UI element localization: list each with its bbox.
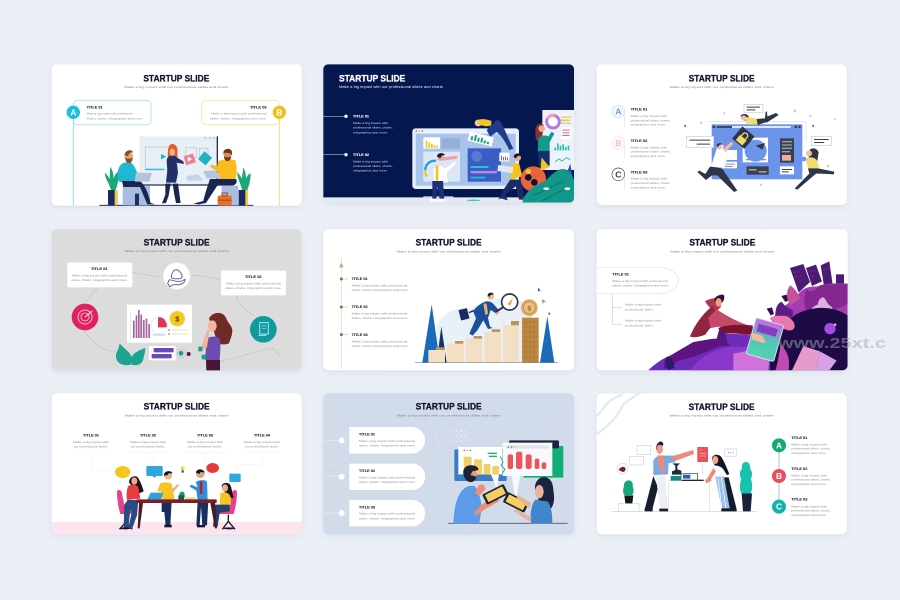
icon: document	[250, 316, 277, 343]
item A: TITLE 01	[631, 108, 648, 112]
step 1: Make a big impact with professional	[352, 283, 408, 287]
item C: professional slides, charts,	[631, 181, 671, 185]
chart board	[127, 305, 192, 343]
pill 3: TITLE 03	[359, 505, 375, 509]
panel: slide 9 desk discussion with circles	[597, 393, 847, 534]
item B: infographics and more.	[791, 482, 827, 486]
pill 3	[323, 500, 425, 526]
item 2: Make a big impact with	[353, 159, 389, 163]
note 1	[67, 263, 132, 287]
column 3: TITLE 03	[197, 433, 213, 437]
step 3: Make a big impact with professional	[352, 339, 408, 343]
item C: C	[776, 502, 782, 512]
sub-items: professional slides.	[625, 323, 654, 327]
item 2: professional slides, charts,	[353, 164, 393, 168]
note 2	[221, 271, 286, 295]
column 4	[237, 433, 281, 473]
dashed connectors	[85, 272, 279, 361]
heading	[670, 402, 774, 418]
heading: Make a big impact with our professional slides and charts	[397, 249, 501, 253]
callout B: TITLE 02	[250, 106, 267, 110]
heading	[339, 74, 443, 89]
illustration: meeting table	[117, 469, 237, 529]
item A: TITLE 01	[791, 436, 808, 440]
step 1	[340, 277, 409, 292]
chart board: $	[175, 314, 179, 323]
item C: Make a big impact with	[791, 504, 827, 508]
woman thinking	[198, 313, 232, 370]
watermark: www.25xt.c	[777, 336, 886, 352]
heading: STARTUP SLIDE	[689, 238, 755, 248]
illustration: two colleagues at desk	[612, 441, 757, 511]
panel: slide 1 two titles with team at screen	[52, 64, 302, 206]
pill 3: slides, charts, infographics and more.	[359, 516, 416, 520]
heading	[125, 402, 229, 418]
pill 2: Make a big impact with professional	[359, 475, 415, 479]
item A: infographics and more.	[791, 451, 827, 455]
column 2: our professional slides.	[131, 445, 166, 449]
icon: hand holding money bag	[163, 263, 190, 289]
timeline	[339, 257, 344, 369]
pill 3: Make a big impact with professional	[359, 512, 415, 516]
pill 2	[323, 464, 425, 490]
column 2: Make a big impact with	[130, 440, 167, 444]
callout B: B	[276, 107, 282, 117]
heading: STARTUP SLIDE	[144, 237, 210, 247]
item A	[772, 436, 831, 455]
step 2	[340, 305, 409, 320]
sub-items: Make a big impact with	[625, 302, 662, 306]
item C: professional slides, charts,	[791, 509, 831, 513]
illustration: businessman climbing steps: $	[527, 305, 531, 312]
panel: slide 5 timeline with stair climbing	[323, 229, 574, 370]
pill 1: TITLE 01	[359, 433, 375, 437]
heading: Make a big impact with our professional slides and charts	[339, 85, 443, 89]
step 3: TITLE 03	[352, 333, 368, 337]
callout A	[67, 100, 151, 206]
callout B	[202, 100, 286, 206]
pill 1: slides, charts, infographics and more.	[359, 444, 416, 448]
sub-items: professional slides.	[625, 307, 654, 311]
sub-items: Make a big impact with	[625, 318, 662, 322]
connector	[777, 445, 781, 507]
column 3: our professional slides.	[188, 445, 223, 449]
column 1: Make a big impact with	[73, 440, 110, 444]
callout A: A	[70, 107, 76, 117]
illustration: businessman climbing steps	[415, 287, 558, 363]
title pill: Make a big impact with professional	[612, 279, 668, 283]
heading: Make a big impact with our professional slides and charts	[397, 414, 501, 418]
item A: A	[776, 440, 782, 450]
item 1: infographics and more.	[353, 130, 388, 134]
leaves	[116, 343, 145, 365]
note 1: Make a big impact with professional	[72, 273, 127, 277]
pill 1: Make a big impact with professional	[359, 439, 415, 443]
heading	[124, 74, 229, 89]
item B: TITLE 02	[631, 139, 648, 143]
title pill: slides, charts, infographics and more.	[612, 283, 669, 287]
item 2: infographics and more.	[353, 169, 388, 173]
heading	[670, 74, 774, 89]
heading: STARTUP SLIDE	[339, 74, 405, 84]
step 2: TITLE 02	[352, 305, 368, 309]
heading: Make a big impact with our professional slides and charts	[125, 249, 229, 253]
callout A: Make a big impact with professional	[87, 112, 133, 116]
heading: STARTUP SLIDE	[143, 74, 209, 84]
illustration: two people with tablets and charts	[448, 430, 568, 523]
step 2: Make a big impact with professional	[352, 311, 408, 315]
item A: Make a big impact with	[631, 114, 667, 118]
item B: professional slides, charts,	[631, 150, 671, 154]
heading: Make a big impact with our professional slides and charts	[670, 414, 774, 418]
illustration: dashboard and people	[412, 110, 574, 203]
heading	[670, 238, 775, 253]
step 1: slides, charts, infographics and more.	[352, 288, 409, 292]
pill 1	[323, 427, 425, 454]
column 1	[72, 433, 115, 471]
heading: Make a big impact with our professional slides and charts	[670, 85, 774, 89]
chat card	[149, 346, 191, 360]
heading: STARTUP SLIDE	[144, 402, 210, 412]
heading: STARTUP SLIDE	[416, 238, 482, 248]
icon: target	[72, 304, 98, 330]
panel: slide 4 grey with icons	[52, 229, 302, 370]
item A: professional slides, charts,	[631, 118, 671, 122]
heading	[397, 402, 501, 418]
callout B: Make a big impact with professional	[211, 112, 267, 116]
illustration: team at screen	[99, 136, 253, 205]
speech bubbles	[115, 463, 241, 482]
column 4: our professional slides.	[245, 445, 280, 449]
item C: TITLE 03	[631, 170, 648, 174]
heading	[125, 237, 229, 253]
sub-items	[613, 293, 662, 327]
heading: Make a big impact with our professional slides and charts	[125, 414, 229, 418]
heading: Make a big impact with our professional slides and charts	[124, 85, 229, 89]
item C	[612, 168, 671, 190]
item 2	[323, 153, 393, 173]
note 2: slides, charts, infographics and more.	[225, 286, 282, 290]
illustration: team climbing browser window	[684, 104, 836, 192]
item B	[772, 467, 831, 486]
item 1: TITLE 01	[353, 114, 369, 118]
item 1: professional slides, charts,	[353, 126, 393, 130]
item B: TITLE 02	[791, 467, 808, 471]
item B: B	[776, 471, 782, 481]
callout A: TITLE 01	[87, 106, 103, 110]
item B: Make a big impact with	[791, 473, 827, 477]
item B: Make a big impact with	[631, 145, 667, 149]
item C: TITLE 03	[791, 498, 808, 502]
column 1: TITLE 01	[83, 433, 99, 437]
panel: slide 2 navy with dashboard	[323, 64, 574, 203]
item A: infographics and more.	[631, 123, 666, 127]
item C: infographics and more.	[631, 185, 666, 189]
illustration: man climbing purple city hill	[648, 261, 848, 370]
item C: infographics and more.	[791, 513, 827, 517]
item A	[612, 105, 671, 128]
item B: infographics and more.	[631, 154, 666, 158]
step 3: slides, charts, infographics and more.	[352, 344, 409, 348]
callout B: slides, charts, infographics and more.	[210, 117, 267, 121]
column 3	[186, 433, 224, 468]
step 2: slides, charts, infographics and more.	[352, 316, 409, 320]
title pill	[597, 268, 678, 293]
step 1: TITLE 01	[352, 277, 368, 281]
item B: B	[615, 138, 621, 148]
column 2	[128, 433, 168, 466]
pill 2: slides, charts, infographics and more.	[359, 480, 416, 484]
item 1: Make a big impact with	[353, 121, 389, 125]
column 2: TITLE 02	[140, 433, 156, 437]
column 1: our professional slides.	[74, 445, 109, 449]
item 2: TITLE 02	[353, 153, 369, 157]
item B: professional slides, charts,	[791, 478, 831, 482]
note 1: TITLE 01	[91, 267, 108, 271]
note 2: TITLE 02	[245, 275, 262, 279]
item C: Make a big impact with	[631, 177, 667, 181]
note 1: slides, charts, infographics and more.	[71, 278, 128, 282]
column 4: Make a big impact with	[244, 440, 281, 444]
panel: slide 7 four titles with meeting table	[52, 393, 302, 534]
item A: Make a big impact with	[791, 442, 827, 446]
item A: A	[615, 107, 622, 117]
item C	[772, 498, 831, 517]
column 4: TITLE 04	[254, 433, 270, 437]
step 3	[340, 333, 409, 348]
item 1	[323, 114, 393, 134]
panel: slide 8 blue grey with pills	[323, 393, 574, 534]
heading: STARTUP SLIDE	[416, 402, 482, 412]
pill 2: TITLE 02	[359, 469, 375, 473]
item C: C	[615, 169, 622, 179]
item A: professional slides, charts,	[791, 447, 831, 451]
panel: slide 6 purple landscape	[597, 229, 848, 370]
column 3: Make a big impact with	[187, 440, 224, 444]
item B	[612, 137, 671, 159]
heading	[397, 238, 501, 253]
title pill: TITLE 01	[612, 273, 629, 277]
note 2: Make a big impact with professional	[226, 281, 281, 285]
callout A: slides, charts, infographics and more.	[87, 117, 144, 121]
heading: STARTUP SLIDE	[689, 402, 755, 412]
panel: slide 3 letters A B C with teamwork	[597, 64, 847, 205]
heading: Make a big impact with our professional slides and charts	[670, 249, 775, 253]
heading: STARTUP SLIDE	[689, 74, 755, 84]
